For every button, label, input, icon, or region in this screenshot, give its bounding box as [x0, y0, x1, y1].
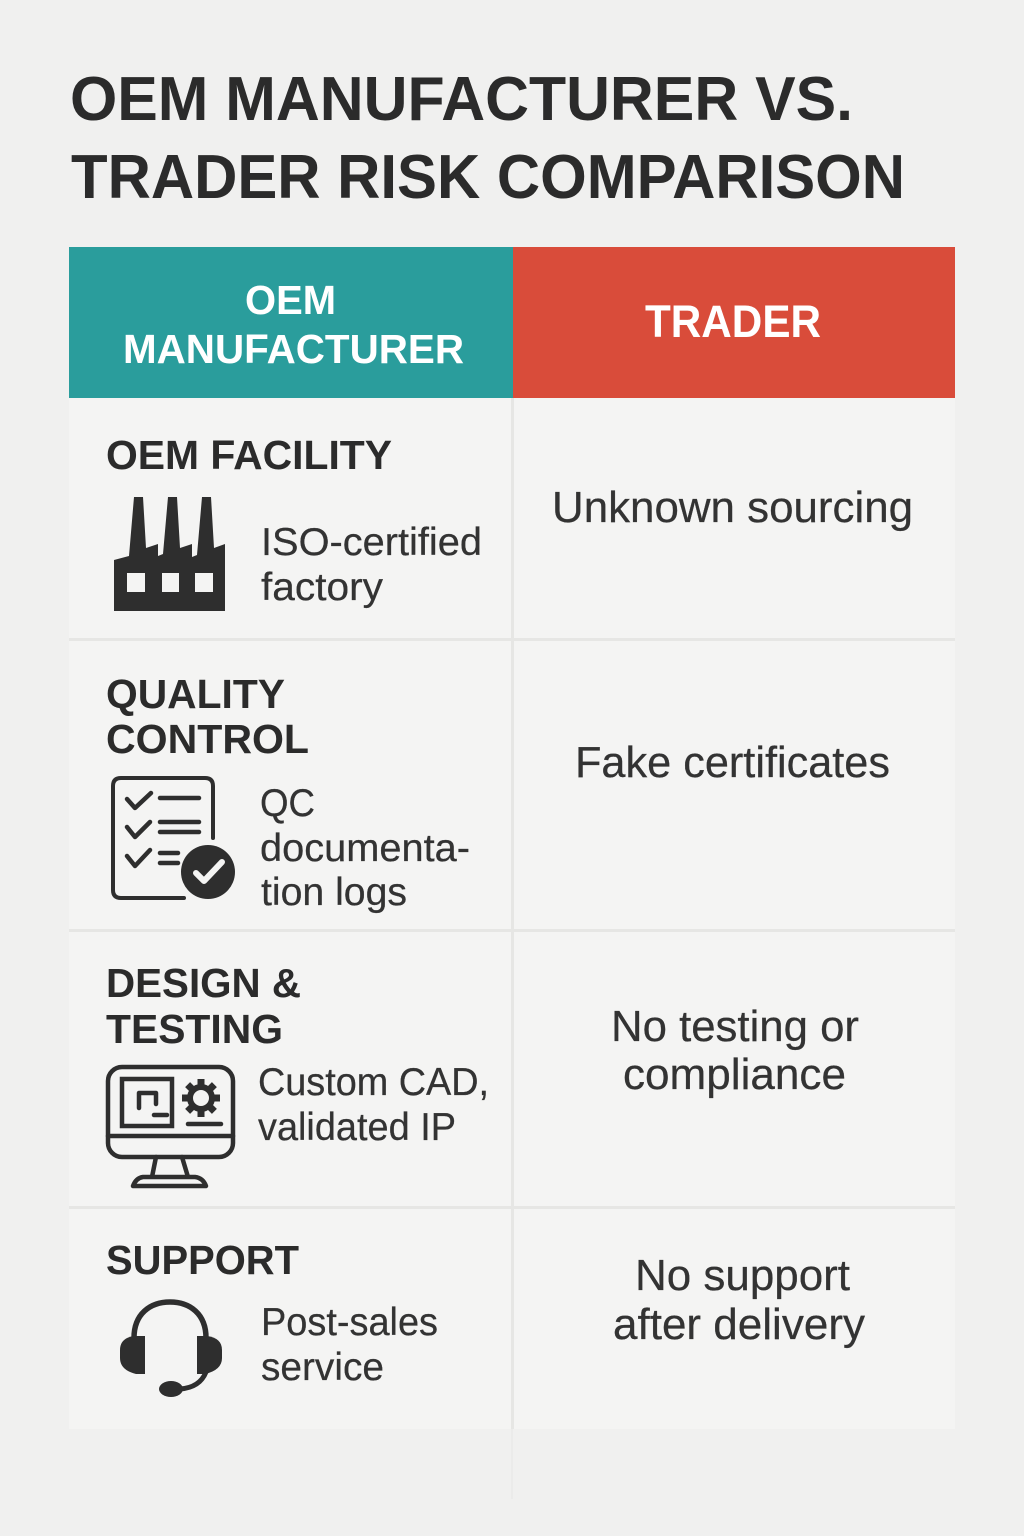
trader: no support after delivery: [613, 1251, 865, 1349]
trader: fake certificates: Fake certificates: [575, 738, 890, 787]
row: OEM facility: [106, 432, 482, 611]
text: ISO-certified factory: ISO-certified: [261, 521, 482, 564]
header: OEM manufacturer: OEM: [245, 277, 336, 323]
row: support: [106, 1237, 438, 1397]
text: QC documentation logs: [260, 782, 470, 914]
icon: factory: [114, 497, 225, 611]
header: OEM manufacturer: [69, 247, 513, 398]
heading: design and testing: [106, 960, 301, 1052]
text: QC documentation logs: documenta-: [260, 827, 470, 870]
text: post-sales service: service: [261, 1346, 384, 1389]
text: ISO-certified factory: [261, 521, 482, 609]
heading: quality control: QUALITY: [106, 671, 285, 717]
text: QC documentation logs: QC: [260, 782, 315, 825]
panel: table rows background: [69, 398, 955, 1429]
trader: no support after delivery: No support: [635, 1251, 850, 1300]
heading: quality control: CONTROL: [106, 716, 309, 762]
text: ISO-certified factory: factory: [261, 566, 384, 609]
row: design and testing: [106, 960, 489, 1186]
trader: no testing or compliance: [611, 1002, 859, 1099]
icon: headset: [120, 1302, 222, 1397]
text: QC documentation logs: tion logs: [261, 871, 407, 914]
text: post-sales service: [261, 1301, 438, 1389]
heading: quality control: [106, 671, 309, 762]
trader: unknown sourcing: Unknown sourcing: [552, 483, 913, 532]
text: custom CAD validated IP: validated IP: [258, 1106, 456, 1149]
trader: no testing or compliance: No testing or: [611, 1002, 859, 1051]
icon: checklist: [113, 778, 235, 899]
title: TRADER RISK COMPARISON: [71, 143, 905, 212]
header: trader: [513, 247, 955, 398]
trader: no testing or compliance: compliance: [623, 1050, 846, 1099]
icon: CAD monitor: [108, 1067, 233, 1186]
heading: design and testing: TESTING: [106, 1006, 283, 1052]
header: OEM manufacturer: MANUFACTURER: [123, 326, 464, 372]
row: quality control: [106, 671, 470, 914]
text: custom CAD validated IP: [258, 1061, 489, 1149]
text: post-sales service: Post-sales: [261, 1301, 438, 1344]
text: custom CAD validated IP: Custom CAD,: [258, 1061, 489, 1104]
title: OEM MANUFACTURER VS.: [70, 65, 853, 134]
heading: support: SUPPORT: [106, 1237, 299, 1283]
header: trader: TRADER: [645, 296, 821, 347]
title: [70, 65, 905, 212]
heading: design and testing: DESIGN &: [106, 960, 301, 1006]
trader: no support after delivery: after delivery: [613, 1300, 865, 1349]
heading: OEM facility: OEM FACILITY: [106, 432, 392, 478]
